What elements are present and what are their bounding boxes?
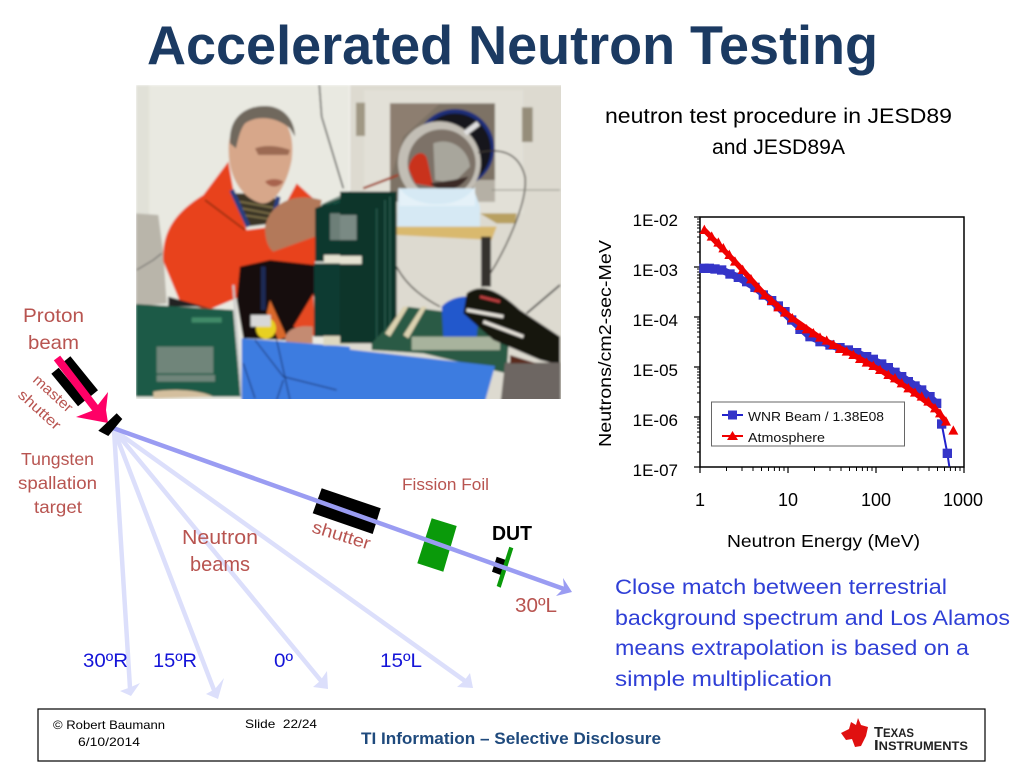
title: Accelerated Neutron Testing [147, 14, 878, 76]
TI logo [841, 718, 968, 754]
DUT board [492, 557, 506, 575]
y axis labels: 1E-05 [633, 361, 678, 380]
label: tungsten spallation target: target [34, 497, 82, 517]
label: proton beam: beam [28, 332, 79, 354]
series: WNR beam [699, 264, 952, 467]
TI logo: INSTRUMENTS [874, 737, 968, 754]
y axis labels [633, 211, 678, 480]
label: tungsten spallation target: Tungsten [21, 449, 94, 469]
angle labels [83, 651, 422, 672]
diagram: beam line [55, 358, 572, 699]
disclosure notice: TI Information – Selective Disclosure [361, 729, 661, 748]
heading: test procedure: and JESD89A [712, 136, 845, 159]
y axis labels: 1E-02 [633, 211, 678, 230]
callout: close match text: background spectrum and Los Alamos [615, 606, 1010, 630]
label: neutron beams: Neutron [182, 527, 258, 549]
label: master shutter [14, 372, 76, 434]
label: master shutter: shutter [14, 387, 64, 434]
footer author and date: 6/10/2014 [78, 735, 140, 749]
label: neutron beams [182, 527, 258, 576]
label: proton beam: Proton [23, 305, 84, 327]
footer author and date [53, 718, 165, 749]
callout: close match text: Close match between terrestrial [615, 575, 947, 599]
chart: neutron spectrum [595, 211, 983, 551]
callout: close match text: simple multiplication [615, 667, 832, 691]
heading: test procedure: neutron test procedure in JESD89 [605, 105, 952, 128]
slide number: Slide 22/24 [245, 717, 317, 731]
tungsten target [98, 413, 122, 436]
footer bar [38, 709, 985, 761]
master shutter bars [55, 359, 94, 403]
label: DUT: DUT [492, 523, 532, 545]
heading: test procedure [605, 105, 952, 159]
label: proton beam [23, 305, 84, 354]
label: tungsten spallation target: spallation [18, 473, 97, 493]
footer author and date: © Robert Baumann [53, 718, 165, 732]
x axis labels [695, 490, 983, 510]
fission foil [417, 518, 457, 572]
y axis labels: 1E-06 [633, 411, 678, 430]
angle labels: 15ºL [380, 651, 422, 672]
TI logo: TEXAS [874, 724, 914, 741]
y axis labels: 1E-04 [633, 311, 678, 330]
label: 30L: 30ºL [515, 595, 557, 617]
angle labels: 0º [274, 651, 293, 672]
callout: close match text [615, 575, 1010, 691]
photo: engineer testing circuit boards in neutron beam [136, 85, 563, 402]
legend: Atmosphere [748, 430, 825, 445]
callout: close match text: means extrapolation is based on a [615, 636, 969, 660]
shutter [313, 488, 381, 534]
angle labels: 30ºR [83, 651, 128, 672]
series: atmosphere [699, 225, 958, 435]
y axis title: Neutrons/cm2-sec-MeV [595, 240, 615, 447]
x axis labels: 1000 [943, 490, 983, 510]
label: tungsten spallation target [18, 449, 97, 517]
y axis labels: 1E-03 [633, 261, 678, 280]
label: shutter: shutter [310, 517, 373, 553]
x axis labels: 10 [778, 490, 798, 510]
x axis title: Neutron Energy (MeV) [727, 531, 920, 551]
angle labels: 15ºR [153, 651, 197, 672]
label: master shutter: master [29, 372, 76, 416]
legend [712, 402, 904, 446]
label: neutron beams: beams [190, 554, 250, 576]
x axis labels: 1 [695, 490, 705, 510]
DUT foil [497, 547, 513, 588]
neutron beams: 30R 15R 0 15L [114, 430, 473, 699]
x axis labels: 100 [861, 490, 891, 510]
proton arrow [57, 358, 108, 423]
legend: WNR Beam / 1.38E08 [748, 409, 884, 424]
label: fission foil: Fission Foil [402, 475, 489, 494]
y axis labels: 1E-07 [633, 461, 678, 480]
main beam arrow [113, 428, 572, 596]
